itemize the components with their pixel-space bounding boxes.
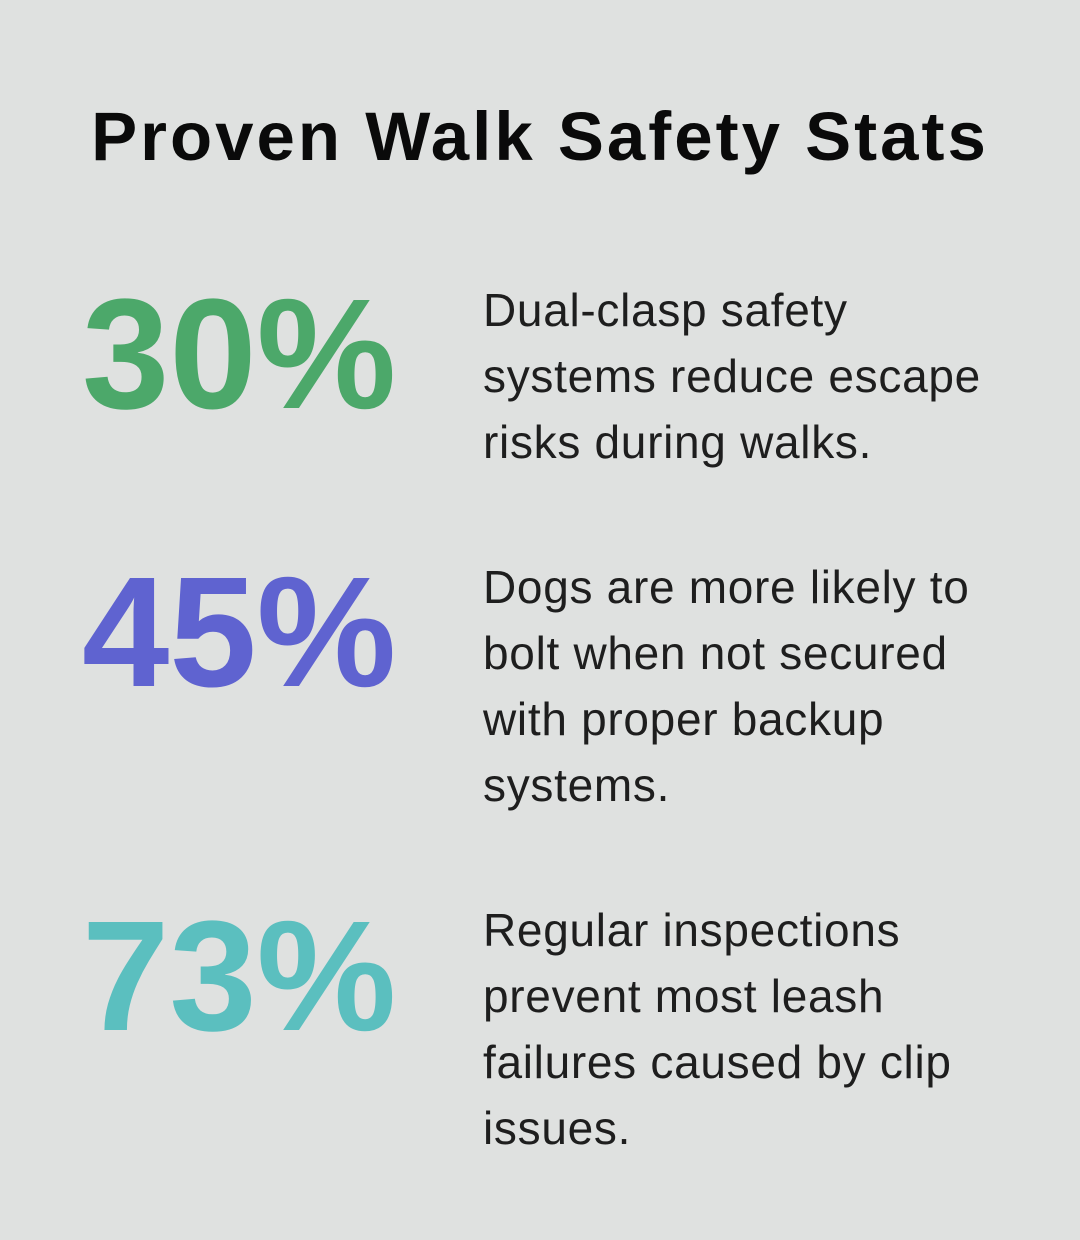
stat 1 text [483,284,981,468]
stat 3 text: Regular inspections [483,904,900,956]
stat 1 text: systems reduce escape [483,350,981,402]
stat 1 number: 30% [82,267,396,442]
stat 2 text: with proper backup [483,693,884,745]
stat 1 text: Dual-clasp safety [483,284,848,336]
stat 2 number: 45% [82,545,396,720]
stat 3 text: issues. [483,1102,631,1154]
stat 1 text: risks during walks. [483,416,872,468]
stat 3 text [483,904,952,1154]
stat 3 text: failures caused by clip [483,1036,952,1088]
stat 2 text: systems. [483,759,670,811]
stat 2 text [483,561,970,811]
stat 2 text: bolt when not secured [483,627,948,679]
title: Proven Walk Safety Stats [91,98,989,175]
stat 3 number: 73% [82,889,396,1064]
stat 2 text: Dogs are more likely to [483,561,970,613]
stat 3 text: prevent most leash [483,970,884,1022]
